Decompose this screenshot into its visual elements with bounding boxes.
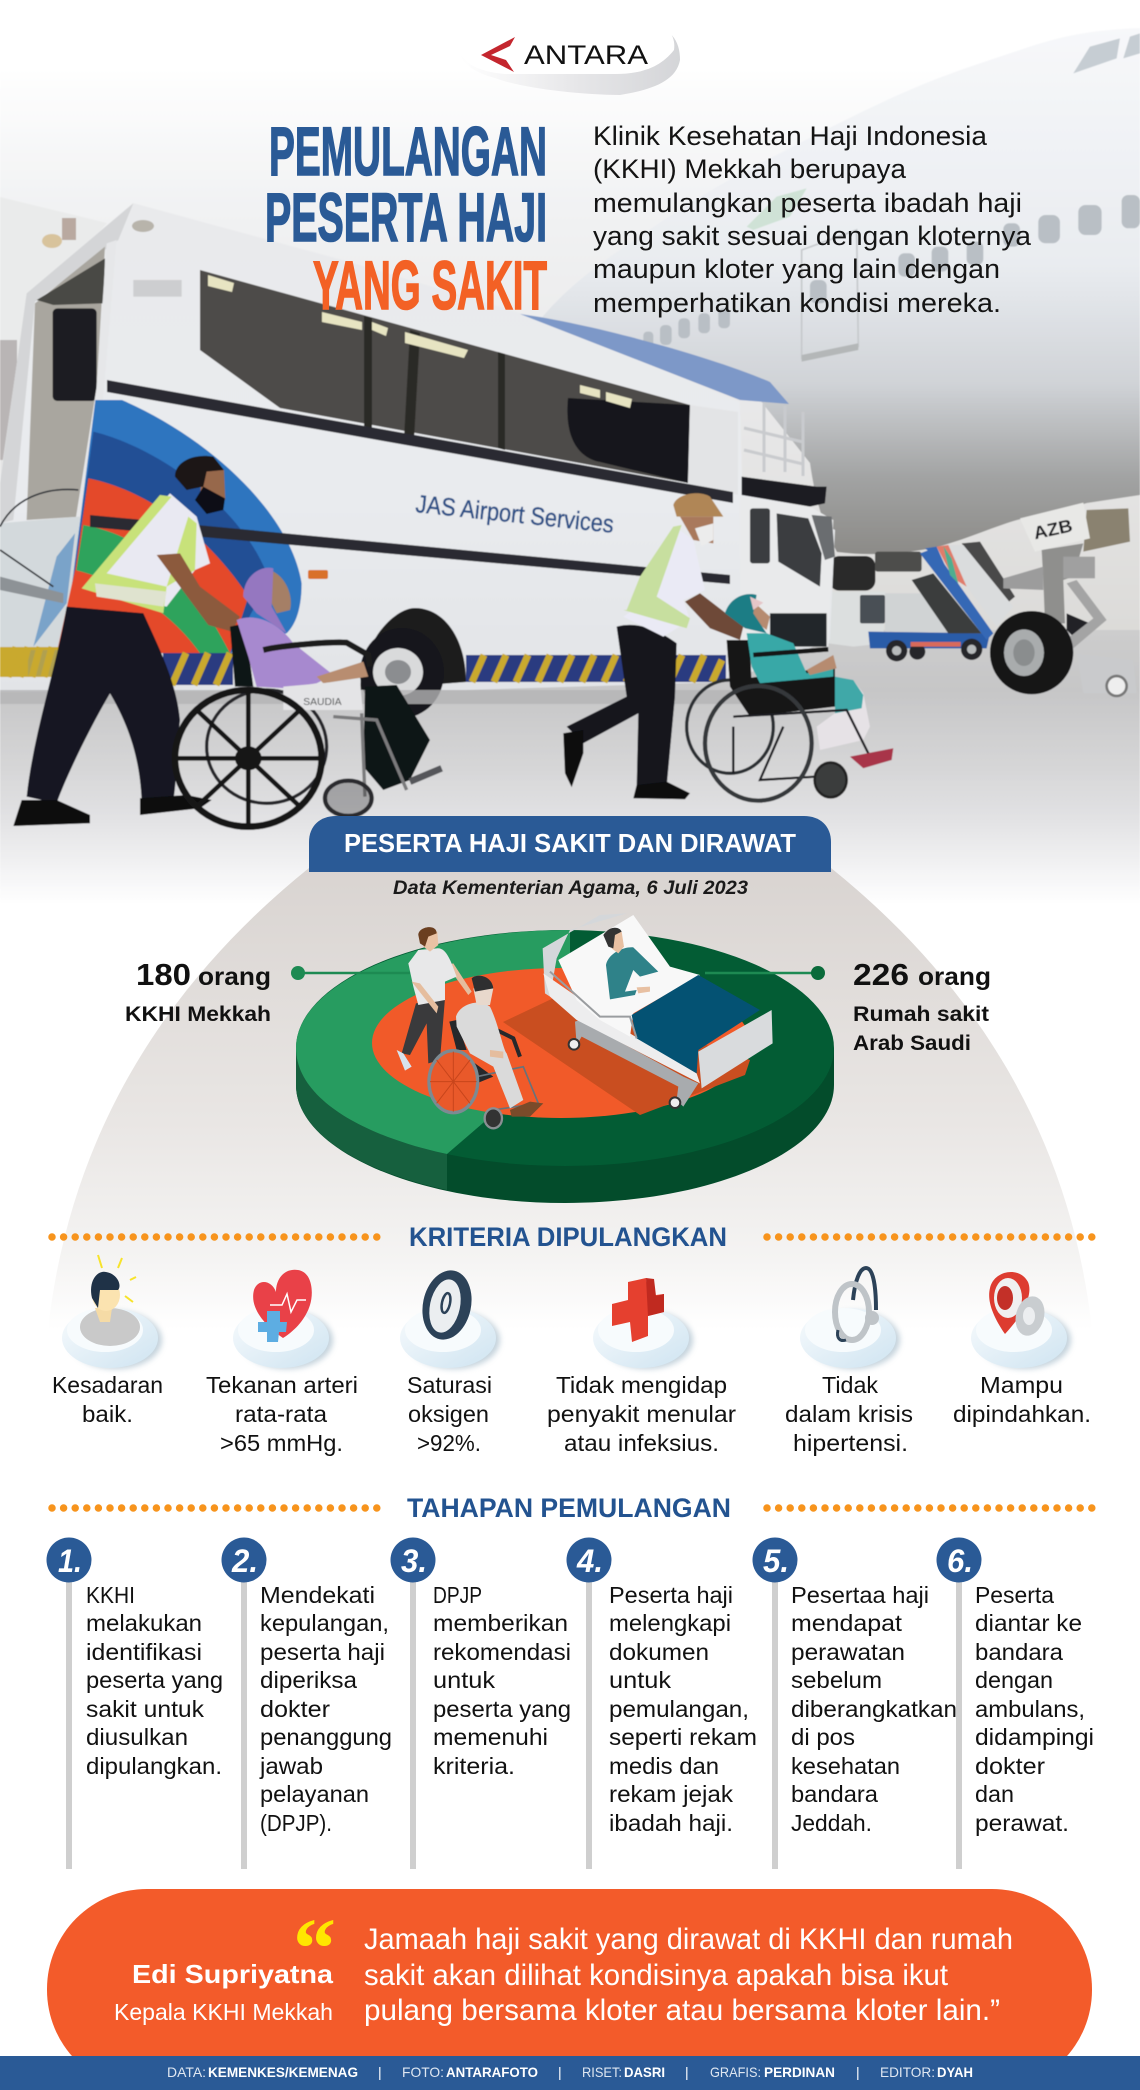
criterion: Saturasi oksigen: Saturasi: [407, 1372, 492, 1398]
title: [265, 113, 547, 324]
wheelchair back wheel: [207, 690, 327, 803]
dome panel background: [48, 868, 1092, 1330]
arm: [157, 553, 240, 632]
step 5: diberangkatkan: [791, 1696, 957, 1722]
criterion: Kesadaran baik: [52, 1372, 163, 1427]
pie label: Rumah sakit Arab Saudi: 226: [853, 957, 909, 992]
step 5: Pesertaa haji: [791, 1582, 929, 1608]
bus dark rub strips: [107, 380, 733, 503]
step 4: Peserta haji: [609, 1582, 733, 1608]
footer credits: GRAFIS:: [710, 2064, 761, 2080]
step 5: di pos: [791, 1724, 855, 1750]
step 1: peserta yang: [86, 1667, 223, 1693]
step 1: sakit untuk: [86, 1696, 205, 1722]
step 5: 5.: [763, 1543, 789, 1579]
mattress: [558, 915, 700, 1037]
pie label: Rumah sakit Arab Saudi: [853, 957, 991, 1055]
teal blouse: [747, 633, 833, 683]
step 2: jawab: [259, 1753, 323, 1779]
step 4: rekam jejak: [609, 1781, 734, 1807]
step 2: [222, 1538, 392, 1869]
step 1: 1.: [58, 1543, 82, 1579]
step 3: 3.: [401, 1543, 427, 1579]
chair seat: [730, 667, 835, 717]
front frame: [333, 713, 407, 797]
step 1: [46, 1538, 223, 1869]
criterion: Tekanan arteri: >65 mmHg.: [220, 1430, 343, 1456]
step 6: Peserta: [975, 1582, 1054, 1608]
bus roof strip: [520, 314, 789, 404]
cargo hatch: [829, 556, 875, 591]
step 6: dan: [975, 1781, 1014, 1807]
step 3: memenuhi: [433, 1724, 548, 1750]
footer credits: DASRI: [624, 2064, 665, 2080]
pie side, dark: [296, 1048, 834, 1203]
criterion: Tidak krisis hipertensi: hipertensi.: [793, 1430, 908, 1456]
bus windows: [200, 270, 690, 483]
backrest: [230, 623, 253, 687]
step 4: untuk: [609, 1667, 672, 1693]
hi-vis vest: [623, 525, 690, 628]
pie label: Rumah sakit Arab Saudi: orang: [918, 963, 991, 991]
step 6: dokter: [975, 1753, 1045, 1779]
criterion: Tidak mengidap penyakit: penyakit menular: [547, 1401, 736, 1427]
bus side text: JAS Airport Services: [414, 490, 615, 539]
airplane windows: [643, 195, 1140, 348]
pie label: KKHI Mekkah: KKHI Mekkah: [125, 1003, 271, 1026]
step 2: peserta haji: [260, 1639, 385, 1665]
footer credits: DATA:: [167, 2064, 206, 2080]
criterion: Saturasi oksigen: oksigen: [408, 1401, 489, 1427]
headscarf and face: [752, 600, 770, 630]
criterion: Mampu dipindahkan: Mampu: [980, 1372, 1063, 1398]
arm: [685, 593, 743, 640]
photo sky: [0, 0, 1140, 650]
footrest and feet: [850, 748, 893, 768]
logo wordmark: ANTARA: [524, 40, 648, 70]
criterion: Tidak mengidap penyakit: [547, 1372, 736, 1456]
step 4: ibadah haji.: [609, 1810, 733, 1836]
patient in bed: [603, 928, 658, 999]
hi-vis vest: [82, 495, 197, 613]
step 4: medis dan: [609, 1753, 719, 1779]
footer credits: KEMENKES/KEMENAG: [208, 2064, 358, 2080]
registration plate AZB: AZB: [1032, 515, 1074, 543]
quote text: [364, 1923, 1013, 2027]
step 5: [752, 1538, 957, 1869]
icon: stethoscope: [800, 1268, 900, 1369]
quote text: pulang bersama kloter atau bersama kloter lain.”: [364, 1994, 1000, 2027]
footer credits: |: [558, 2064, 562, 2080]
criterion: Tidak mengidap penyakit: atau infeksius.: [564, 1430, 719, 1456]
airplane fuselage: [540, 28, 1140, 554]
step 6: bandara: [975, 1639, 1063, 1665]
heading: kriteria dipulangkan: KRITERIA DIPULANGKAN: [409, 1222, 727, 1252]
title: PEMULANGAN: [269, 113, 547, 190]
patient in wheelchair, left: [175, 568, 442, 827]
criterion: Tekanan arteri: rata-rata: [235, 1401, 327, 1427]
bus wheel: [360, 608, 466, 718]
apron ground: [0, 630, 1140, 908]
step 4: melengkapi: [609, 1610, 731, 1636]
step 2: kepulangan,: [260, 1610, 389, 1636]
hand: [807, 655, 837, 675]
step 6: dengan: [975, 1667, 1053, 1693]
intro paragraph: memulangkan peserta ibadah haji: [593, 188, 1022, 218]
step 2: 2.: [231, 1543, 258, 1579]
shoes: [563, 730, 690, 799]
trousers: [567, 625, 677, 787]
criterion: Mampu dipindahkan: [953, 1372, 1091, 1427]
step 2: (DPJP).: [260, 1810, 332, 1836]
step 5: Jeddah.: [791, 1810, 872, 1836]
logo pill: [460, 27, 680, 95]
criterion: Tidak krisis hipertensi: Tidak: [822, 1372, 879, 1398]
step 3: rekomendasi: [433, 1639, 571, 1665]
pie label: KKHI Mekkah: orang: [198, 963, 271, 991]
footer credits: [0, 2056, 1140, 2090]
patient in wheelchair, right: [687, 594, 893, 801]
3D pie chart: patients by location: [291, 913, 834, 1203]
step 1: melakukan: [86, 1610, 202, 1636]
footer credits: |: [378, 2064, 382, 2080]
step 3: memberikan: [433, 1610, 568, 1636]
criterion: Tekanan arteri: [206, 1372, 358, 1456]
bus amber lamp: [308, 570, 328, 579]
under-bus shadow: [0, 690, 830, 704]
section tab: peserta haji sakit dan dirawat: [309, 816, 831, 872]
head, mask and cap: [680, 517, 713, 543]
bus roof marker: [132, 220, 154, 232]
step 4: seperti rekam: [609, 1724, 757, 1750]
illustration: hospital bed with patient: [543, 913, 773, 1108]
step 3: peserta yang: [433, 1696, 571, 1722]
step 5: sebelum: [791, 1667, 882, 1693]
frame: [733, 710, 873, 780]
title: YANG SAKIT: [313, 247, 547, 324]
criterion: Tidak krisis hipertensi: [785, 1372, 913, 1456]
side rail: [550, 972, 637, 1038]
speaker name: Edi Supriyatna: [132, 1959, 334, 1989]
step 1: identifikasi: [86, 1639, 202, 1665]
step 3: untuk: [433, 1667, 496, 1693]
intro paragraph: maupun kloter yang lain dengan: [593, 254, 1000, 284]
blanket: [632, 975, 760, 1073]
logo mark: [481, 37, 515, 72]
seat card: [283, 680, 363, 710]
leader line: left: [291, 966, 410, 980]
foot board: [698, 1010, 773, 1088]
step 6: perawat.: [975, 1810, 1069, 1836]
footer credits: EDITOR:: [880, 2064, 935, 2080]
shirt: [623, 527, 705, 637]
wheelchair: [429, 1020, 538, 1128]
data source note: Data Kementerian Agama, 6 Juli 2023: [393, 878, 748, 899]
front caster: [325, 781, 372, 816]
criterion: Saturasi oksigen: >92%.: [417, 1430, 481, 1456]
bus rear doorway: [0, 203, 182, 650]
attendant: [397, 927, 472, 1071]
pie side, light: [296, 1048, 447, 1190]
criterion: Tidak krisis hipertensi: dalam krisis: [785, 1401, 913, 1427]
step 2: Mendekati: [260, 1582, 375, 1608]
icon: oxygen saturation ring: [400, 1266, 500, 1369]
bus boarding platform: [0, 489, 80, 650]
criterion: Kesadaran baik: baik.: [82, 1401, 133, 1427]
section tab: peserta haji sakit dan dirawat: PESERTA HAJI SAKIT DAN DIRAWAT: [344, 828, 796, 858]
pie top, dark slice: [296, 930, 834, 1166]
back wheel: [687, 680, 773, 773]
person pushing wheelchair, right: [563, 493, 743, 799]
airplane cockpit windows and markings: [643, 33, 1140, 362]
quote panel: [47, 1889, 1092, 2090]
step 1: diusulkan: [86, 1724, 188, 1750]
backrest: [727, 640, 752, 687]
step 6: [936, 1538, 1094, 1869]
landing gear wheel: [990, 611, 1073, 694]
armrest: [753, 649, 828, 655]
intro paragraph: [593, 121, 1032, 318]
step 6: ambulans,: [975, 1696, 1085, 1722]
criterion: Saturasi oksigen: [407, 1372, 492, 1456]
inner orange circle: [372, 968, 750, 1118]
illustration: attendant and wheelchair patient: [397, 927, 543, 1128]
logo: ANTARA: [460, 24, 680, 95]
quote mark: “: [293, 1900, 336, 1996]
bus hazard skirt: [0, 647, 726, 685]
step 5: perawatan: [791, 1639, 905, 1665]
step 4: 4.: [576, 1543, 603, 1579]
bus truck cab: [740, 477, 835, 647]
footer credits: DYAH: [937, 2064, 973, 2080]
head and mask: [200, 470, 225, 500]
main wheel: [175, 690, 322, 827]
step 2: pelayanan: [260, 1781, 369, 1807]
heading: tahapan pemulangan: TAHAPAN PEMULANGAN: [407, 1493, 731, 1523]
pie label: Rumah sakit Arab Saudi: Rumah sakit: [853, 1003, 989, 1026]
pie label: Rumah sakit Arab Saudi: Arab Saudi: [853, 1032, 971, 1055]
terminal building: [0, 197, 107, 460]
criterion: Kesadaran baik: Kesadaran: [52, 1372, 163, 1398]
quote text: Jamaah haji sakit yang dirawat di KKHI dan rumah: [364, 1923, 1013, 1956]
step 6: 6.: [947, 1543, 973, 1579]
patient arm: [317, 662, 368, 683]
step 3: kriteria.: [433, 1753, 515, 1779]
airplane door: [802, 230, 858, 358]
bus body: [0, 203, 835, 718]
icon: heart blood pressure: [233, 1270, 333, 1369]
step 4: dokumen: [609, 1639, 709, 1665]
icon: person conscious: [62, 1255, 162, 1369]
blouse: [237, 618, 333, 688]
boarding stairs: [875, 542, 1015, 640]
headboard: [543, 913, 627, 997]
patient legs: [363, 685, 430, 790]
icon: location pin mobility: [971, 1272, 1071, 1369]
intro paragraph: (KKHI) Mekkah berupaya: [593, 154, 907, 184]
step 5: bandara: [791, 1781, 878, 1807]
criterion: Mampu dipindahkan: dipindahkan.: [953, 1401, 1091, 1427]
pie top, light slice: [296, 930, 570, 1154]
intro paragraph: yang sakit sesuai dengan kloternya: [593, 221, 1032, 251]
quote text: sakit akan dilihat kondisinya apakah bisa ikut: [364, 1959, 949, 1992]
speaker role: Kepala KKHI Mekkah: [114, 1999, 333, 2025]
seat card: SAUDIA: [303, 697, 342, 708]
criterion: Tidak mengidap penyakit: Tidak mengidap: [556, 1372, 727, 1398]
criterion: Tekanan arteri: Tekanan arteri: [206, 1372, 358, 1398]
step 1: KKHI: [86, 1582, 135, 1608]
main wheel: [705, 686, 812, 801]
intro paragraph: memperhatikan kondisi mereka.: [593, 288, 1001, 318]
step 5: mendapat: [791, 1610, 903, 1636]
title: PESERTA HAJI: [265, 179, 547, 256]
footer credits: RISET:: [582, 2064, 622, 2080]
far cart: [1077, 653, 1137, 696]
trousers: [27, 607, 180, 803]
icon: red medical cross: [593, 1278, 693, 1369]
person pushing wheelchair, left: [13, 456, 240, 826]
step 4: [566, 1538, 757, 1869]
pie label: KKHI Mekkah: 180: [136, 957, 191, 992]
pie label: KKHI Mekkah: [125, 957, 271, 1026]
armrest: [263, 642, 370, 667]
footer credits: FOTO:: [402, 2064, 444, 2080]
front caster: [815, 763, 847, 797]
footer credits: ANTARAFOTO: [446, 2064, 538, 2080]
step 1: dipulangkan.: [86, 1753, 222, 1779]
step 3: [390, 1538, 571, 1869]
step 2: penanggung: [260, 1724, 392, 1750]
bus rear upper panel: [688, 405, 738, 495]
leader line: right: [705, 966, 825, 980]
wheelchair patient: [456, 976, 543, 1117]
step 3: DPJP: [433, 1582, 482, 1608]
registration plate AZB: [1020, 503, 1090, 552]
bed frame: [575, 1020, 698, 1107]
bus colour swoosh: [57, 390, 302, 653]
skirt: [817, 677, 870, 750]
photo: airport bus, airplane and wheelchair patients: [0, 0, 1140, 908]
shirt: [97, 493, 210, 607]
hijab and face: [270, 570, 291, 613]
footer credits: |: [856, 2064, 860, 2080]
step 6: didampingi: [975, 1724, 1094, 1750]
intro paragraph: Klinik Kesehatan Haji Indonesia: [593, 121, 988, 151]
bed shadow on orange: [503, 995, 750, 1115]
step 4: pemulangan,: [609, 1696, 749, 1722]
step 2: dokter: [260, 1696, 330, 1722]
step 6: diantar ke: [975, 1610, 1082, 1636]
footer credits: PERDINAN: [764, 2064, 835, 2080]
far right equipment, stairs, truck and landing gear: [828, 503, 1137, 696]
step 2: diperiksa: [260, 1667, 357, 1693]
footer credits: |: [685, 2064, 689, 2080]
landing gear strut: [1003, 508, 1130, 648]
step 5: kesehatan: [791, 1753, 900, 1779]
shoes: [13, 795, 212, 826]
service truck: [828, 592, 990, 661]
bus roof rails: [744, 404, 803, 476]
